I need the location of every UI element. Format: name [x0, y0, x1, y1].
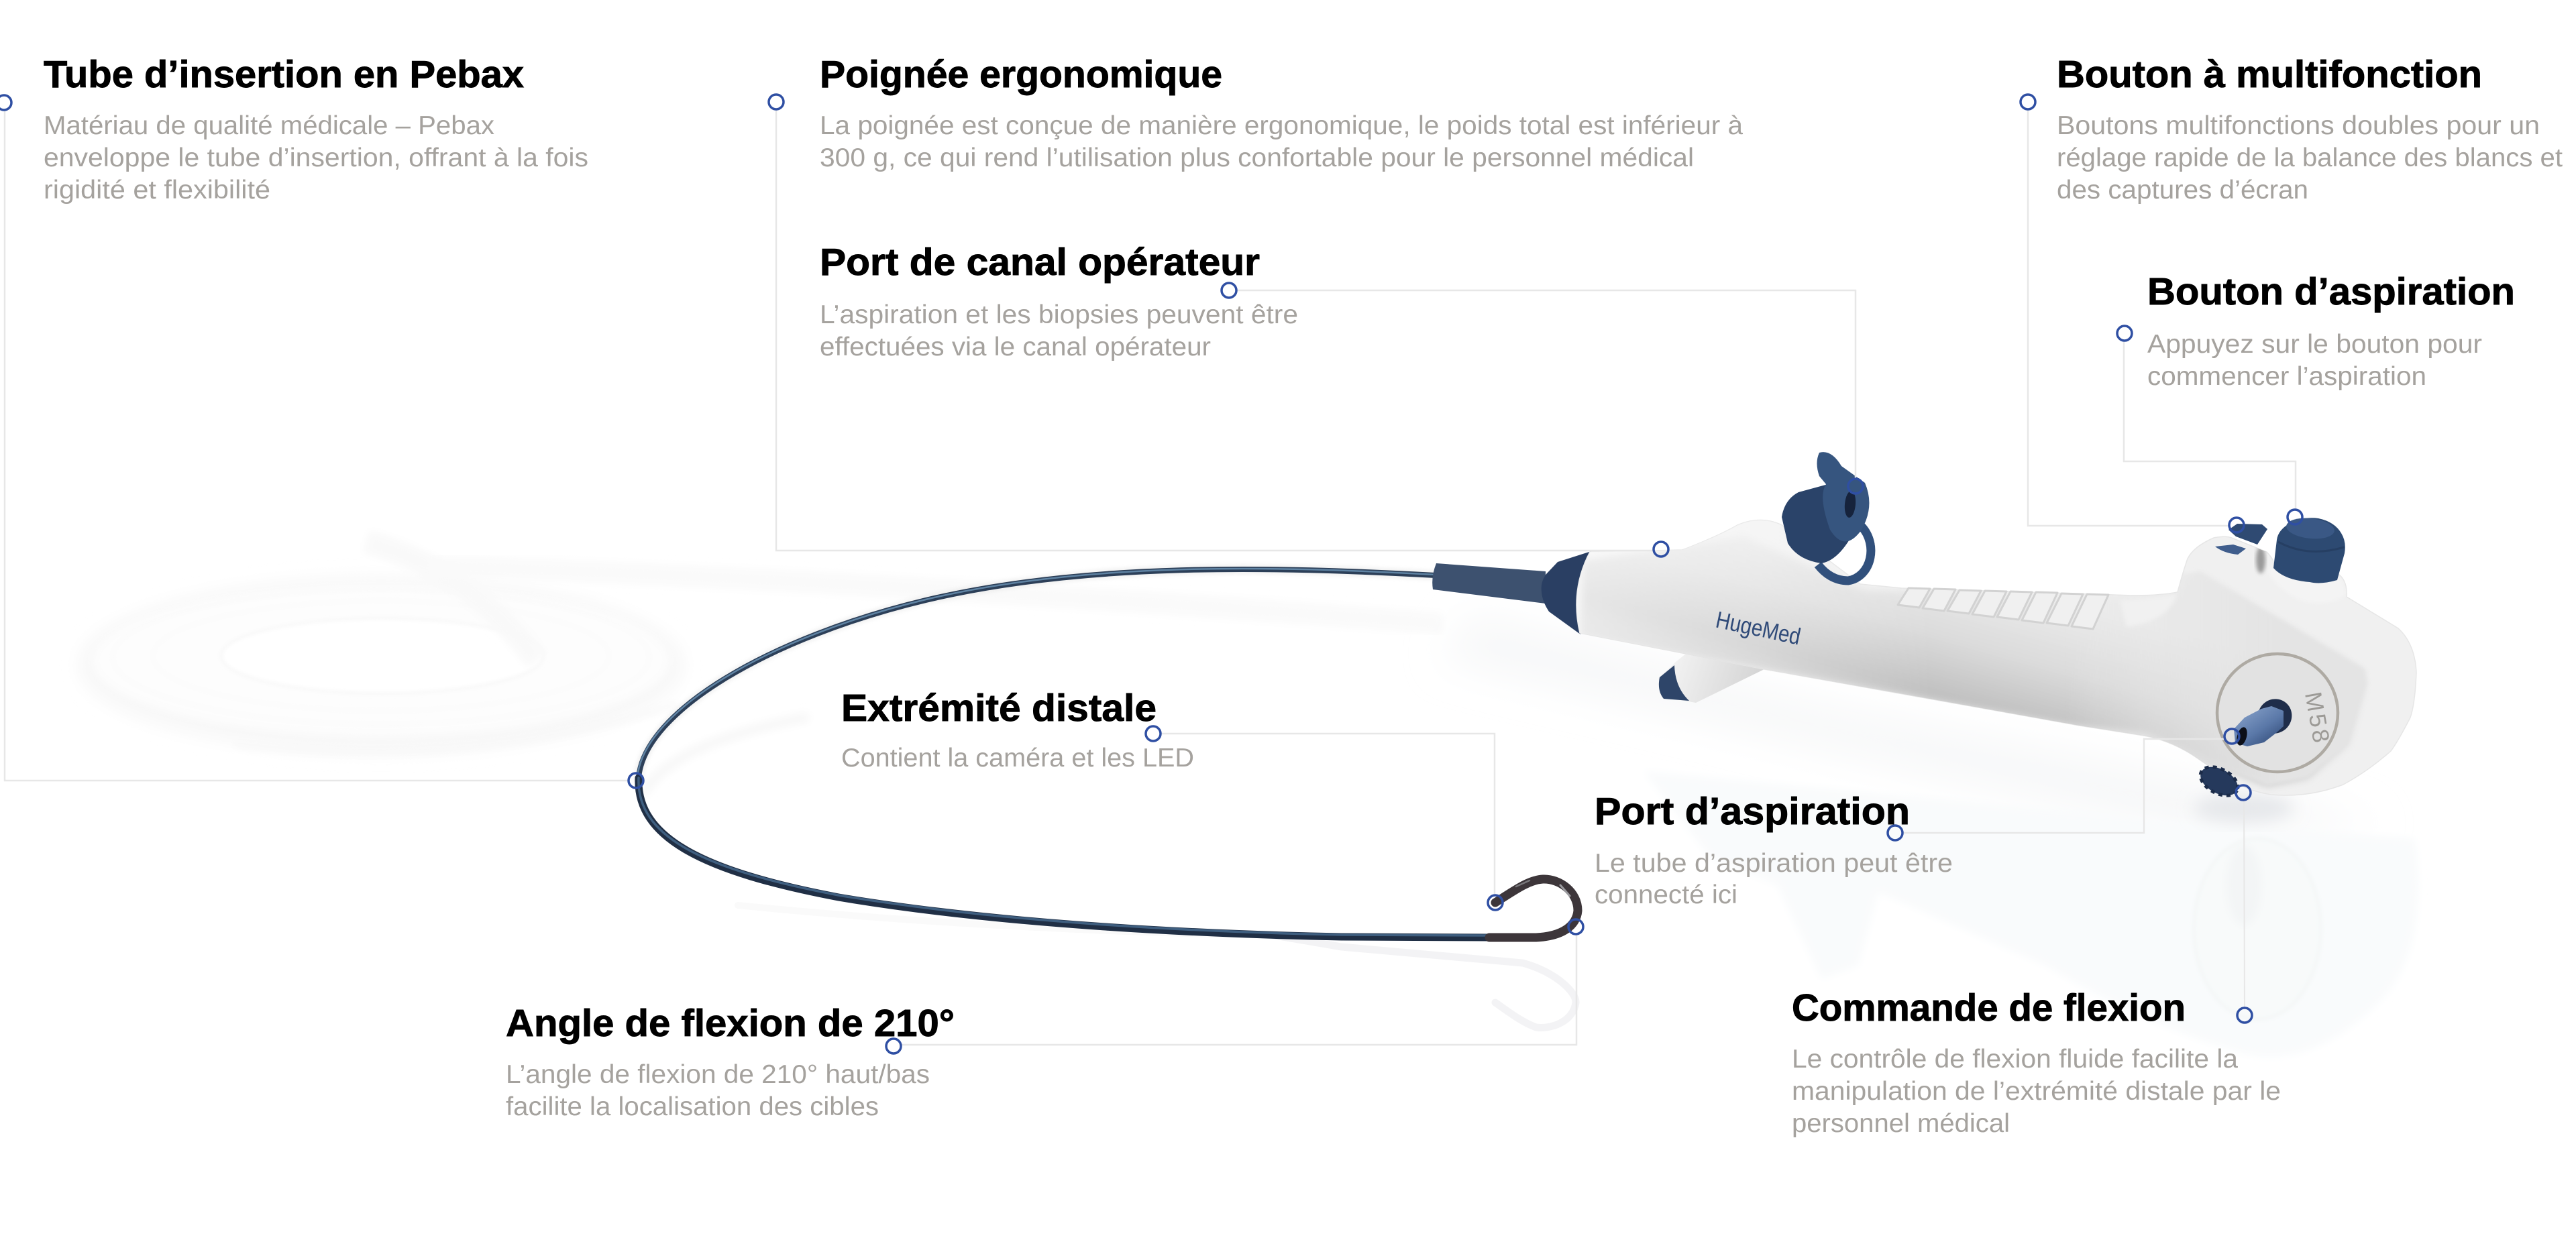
- description: rigidité et flexibilité: [44, 176, 270, 205]
- disc with ring: [2217, 654, 2338, 772]
- text block: Poignée ergonomique: [820, 53, 1743, 172]
- suction port nozzle: [2234, 692, 2298, 746]
- description: réglage rapide de la balance des blancs et: [2057, 144, 2563, 172]
- text block: Commande de flexion: [1792, 986, 2281, 1138]
- description: facilite la localisation des cibles: [506, 1092, 879, 1121]
- heading: Commande de flexion: [1792, 986, 2186, 1029]
- description: des captures d’écran: [2057, 176, 2308, 205]
- handle body: [1576, 520, 2416, 795]
- leader: Bouton d'aspiration: [2117, 326, 2302, 524]
- description: effectuées via le canal opérateur: [820, 333, 1211, 361]
- description: enveloppe le tube d’insertion, offrant à la fois: [44, 144, 588, 172]
- neck sleeve: [1432, 563, 1546, 604]
- description: 300 g, ce qui rend l’utilisation plus confortable pour le personnel médical: [820, 144, 1694, 172]
- text block: Bouton à multifonction: [2057, 53, 2563, 205]
- leader: Bouton à multifonction: [2021, 95, 2244, 532]
- leader: Port de canal opérateur: [1222, 283, 1863, 494]
- description: [820, 300, 1298, 361]
- heading: Port de canal opérateur: [820, 241, 1260, 284]
- leader: Angle de flexion: [886, 919, 1583, 1053]
- grip ribs: [1898, 588, 2108, 629]
- description: Le tube d’aspiration peut être: [1595, 849, 1953, 878]
- brand text: HugeMed: [1713, 607, 1803, 650]
- leader: Port d'aspiration: [1888, 729, 2239, 840]
- description: Contient la caméra et les LED: [841, 744, 1194, 773]
- heading: Bouton à multifonction: [2057, 53, 2482, 96]
- leader: Tube d'insertion: [0, 95, 643, 788]
- suction button: [2273, 516, 2345, 583]
- navy collar: [1542, 551, 1591, 634]
- control wheel: [2196, 761, 2243, 801]
- description: connecté ici: [1595, 880, 1737, 909]
- insertion tube: [637, 569, 1491, 937]
- text block: Bouton d'aspiration: [2147, 270, 2515, 391]
- navy grip end: [1659, 665, 1689, 701]
- multifunction buttons: [2215, 524, 2267, 555]
- leader: Extrémité distale: [1146, 726, 1503, 910]
- leader: Poignée ergonomique: [769, 95, 1668, 557]
- description: [2057, 111, 2563, 205]
- description: L’aspiration et les biopsies peuvent être: [820, 300, 1298, 329]
- tube reflection: [644, 718, 1576, 1028]
- heading: Poignée ergonomique: [820, 53, 1222, 96]
- distal tip with bending section: [1489, 879, 1578, 937]
- description: Matériau de qualité médicale – Pebax: [44, 111, 495, 140]
- description: [1792, 1045, 2281, 1138]
- text block: Port de canal opérateur: [820, 241, 1298, 361]
- lower finger grip: [1658, 654, 1764, 703]
- description: Boutons multifonctions doubles pour un: [2057, 111, 2540, 140]
- description: personnel médical: [1792, 1109, 2010, 1138]
- leader: Commande de flexion: [2236, 785, 2252, 1023]
- faded tube coil: [78, 542, 1442, 754]
- text block: Angle de flexion de 210°: [506, 1002, 955, 1121]
- text block: Extrémité distale: [841, 687, 1194, 773]
- text block: Port d'aspiration: [1595, 790, 1953, 909]
- description: [506, 1060, 930, 1121]
- description: Le contrôle de flexion fluide facilite la: [1792, 1045, 2238, 1074]
- description: [820, 111, 1743, 172]
- description: manipulation de l’extrémité distale par le: [1792, 1077, 2281, 1106]
- handle shading: [1570, 510, 2367, 786]
- description: [44, 111, 588, 205]
- description: La poignée est conçue de manière ergonomique, le poids total est inférieur à: [820, 111, 1743, 140]
- heading: Tube d’insertion en Pebax: [44, 53, 524, 96]
- description: Appuyez sur le bouton pour: [2147, 330, 2482, 359]
- model text: M58: [2300, 690, 2334, 747]
- description: [2147, 330, 2482, 391]
- heading: Bouton d’aspiration: [2147, 270, 2515, 313]
- description: L’angle de flexion de 210° haut/bas: [506, 1060, 930, 1089]
- heading: Port d’aspiration: [1595, 790, 1910, 833]
- text block: Tube d'insertion en Pebax: [44, 53, 588, 205]
- description: commencer l’aspiration: [2147, 362, 2426, 391]
- channel port cap: [1782, 452, 1871, 581]
- handle shadow and reflection: [1442, 617, 2418, 1057]
- description: [1595, 849, 1953, 909]
- endoscope handle: [1432, 452, 2416, 801]
- heading: Extrémité distale: [841, 687, 1157, 730]
- heading: Angle de flexion de 210°: [506, 1002, 955, 1045]
